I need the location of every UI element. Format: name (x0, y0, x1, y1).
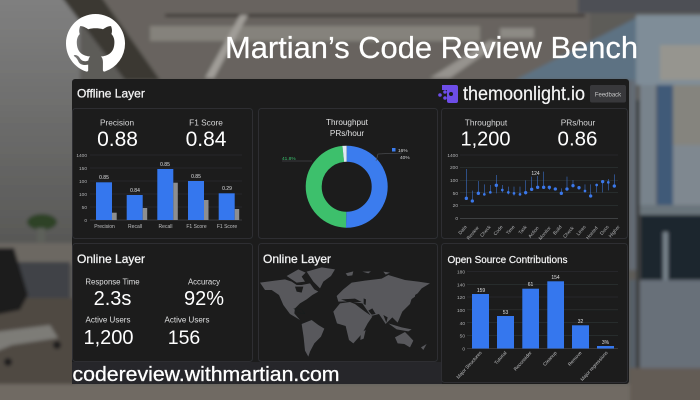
bar chart: contributions: 180 (457, 270, 465, 276)
error-bar chart: 1400 (447, 153, 458, 159)
bar chart: offline metrics: Precision (94, 224, 115, 230)
donut labels: 16% (398, 148, 408, 154)
panel: open source contributions (442, 244, 628, 383)
bar chart: contributions: Tutorial (493, 350, 508, 366)
panel: online layer map (258, 244, 438, 362)
metric: F1 score: F1 Score (189, 118, 223, 128)
bar chart: offline metrics: Recall (128, 224, 142, 230)
metric: active users 1,200: Active Users (86, 316, 130, 324)
metric: response time (85, 278, 140, 310)
heading: throughput PRs/hour: PRs/hour (330, 129, 364, 138)
heading: online layer: Online Layer (77, 252, 145, 266)
bar chart: offline metrics: 50 (82, 205, 87, 211)
bar chart: contributions: Cleanup (542, 350, 559, 368)
error-bar chart: Lines (576, 224, 588, 237)
bar chart: contributions: 53 (503, 310, 508, 316)
donut labels (282, 148, 410, 162)
panel: precision and F1 bar chart (72, 108, 252, 238)
error-bar chart: Task (518, 224, 529, 236)
error-bar chart: Data (457, 224, 469, 236)
logo: themoonlight.io: themoonlight.io (463, 83, 585, 105)
bar chart: contributions: 159 (477, 288, 485, 294)
error-bar chart: Hosted (585, 225, 600, 241)
metric: active users 156 (165, 316, 209, 349)
metric: active users 1,200: 1,200 (83, 327, 134, 349)
panel: online layer metrics (72, 244, 252, 362)
metric: precision: 0.88 (97, 128, 138, 151)
bar chart: contributions: 120 (457, 295, 465, 301)
metric: precision: Precision (100, 118, 134, 128)
heading: online layer: Online Layer (263, 252, 331, 266)
bar chart: offline metrics: 0.85 (160, 162, 170, 168)
error-bar chart: Higher (608, 224, 622, 239)
url caption: codereview.withmartian.com (72, 363, 340, 386)
bar chart: contributions: 0 (462, 346, 465, 352)
error-bar chart: Time (505, 224, 517, 236)
error-bar chart (447, 153, 622, 242)
bar chart: contributions (455, 270, 618, 383)
error-bar chart: 20 (453, 203, 458, 209)
metric: throughput: Throughput (465, 118, 508, 128)
error-bar chart: Build (552, 224, 564, 236)
error-bar chart: Monitor (538, 225, 553, 242)
error-bar chart: Check (562, 225, 576, 240)
bar chart: contributions: Major Structures (455, 350, 484, 380)
heading: throughput PRs/hour (326, 118, 369, 138)
error-bar chart: 200 (450, 165, 458, 171)
bar chart: offline metrics: 0 (84, 218, 87, 224)
metric: active users 1,200 (83, 316, 134, 349)
metric: precision (97, 118, 138, 151)
bar chart: offline metrics: 1400 (76, 153, 87, 159)
metric: accuracy: Accuracy (188, 278, 220, 286)
metric: F1 score: 0.84 (186, 128, 227, 151)
panel: throughput donut (258, 108, 438, 238)
metric: active users 156: 156 (168, 327, 200, 349)
heading: offline layer: Offline Layer (77, 86, 145, 100)
metric: throughput: 1,200 (460, 128, 511, 150)
bar chart: offline metrics: 0.84 (130, 188, 140, 194)
world map (260, 267, 430, 357)
bar chart: offline metrics: 0.85 (99, 175, 109, 181)
bar chart: contributions: 154 (551, 275, 560, 281)
bar chart: contributions: 61 (528, 282, 533, 288)
bar chart: offline metrics: Recall (159, 224, 172, 230)
bar chart: contributions: 100 (457, 308, 465, 314)
bar chart: contributions: Major regressions (580, 350, 610, 383)
panel: dashboard (72, 79, 629, 384)
bar chart: contributions: Reconsider (513, 350, 534, 372)
bar chart: offline metrics: 100 (79, 192, 87, 198)
metric: accuracy (184, 278, 224, 310)
donut chart (310, 150, 383, 223)
bar chart: offline metrics: F1 Score (217, 224, 237, 230)
bar chart: offline metrics: 0.29 (222, 186, 232, 192)
metric: response time: Response Time (85, 278, 140, 286)
heading: throughput PRs/hour: Throughput (326, 118, 369, 127)
logo: themoonlight.io: Feedback (595, 92, 622, 98)
error-bar chart: 124 (531, 171, 540, 177)
error-bar chart: Docs (599, 224, 611, 237)
donut labels: 41.8% (282, 156, 296, 162)
error-bar chart: Review (466, 225, 481, 241)
bar chart: contributions: Remove (567, 350, 584, 368)
error-bar chart: 100 (450, 178, 458, 184)
metric: F1 score (186, 118, 227, 151)
bar chart: contributions: 40 (460, 321, 465, 327)
metric: PRs/hour: 0.86 (558, 128, 597, 150)
error-bar chart: Code (493, 224, 505, 237)
metric: response time: 2.3s (94, 288, 131, 310)
bar chart: offline metrics: F1 Score (186, 224, 207, 230)
metric: active users 156: Active Users (165, 316, 209, 324)
bar chart: contributions: 3% (602, 340, 610, 346)
bar chart: offline metrics: 0.85 (191, 174, 201, 180)
error-bar chart: Action (527, 225, 541, 240)
bar chart: offline metrics: 100 (79, 179, 87, 185)
bar chart: offline metrics (76, 153, 242, 230)
metric: PRs/hour (558, 118, 597, 150)
error-bar chart: 0 (455, 216, 458, 222)
bar chart: offline metrics: 150 (79, 166, 87, 172)
error-bar chart: 50 (453, 191, 458, 197)
bar chart: contributions: 50 (460, 334, 465, 340)
metric: throughput (460, 118, 511, 150)
donut labels: 40% (400, 155, 410, 161)
heading: open source contributions: Open Source Contributions (448, 255, 568, 266)
bar chart: contributions: 140 (457, 282, 465, 288)
error-bar chart: Check (479, 224, 493, 239)
metric: PRs/hour: PRs/hour (561, 118, 596, 128)
metric: accuracy: 92% (184, 288, 224, 310)
title: Martian’s Code Review Bench (225, 31, 638, 65)
panel: throughput and error-bar chart (442, 108, 628, 242)
bar chart: contributions: 32 (578, 319, 583, 325)
icon: GitHub logo (66, 14, 125, 72)
